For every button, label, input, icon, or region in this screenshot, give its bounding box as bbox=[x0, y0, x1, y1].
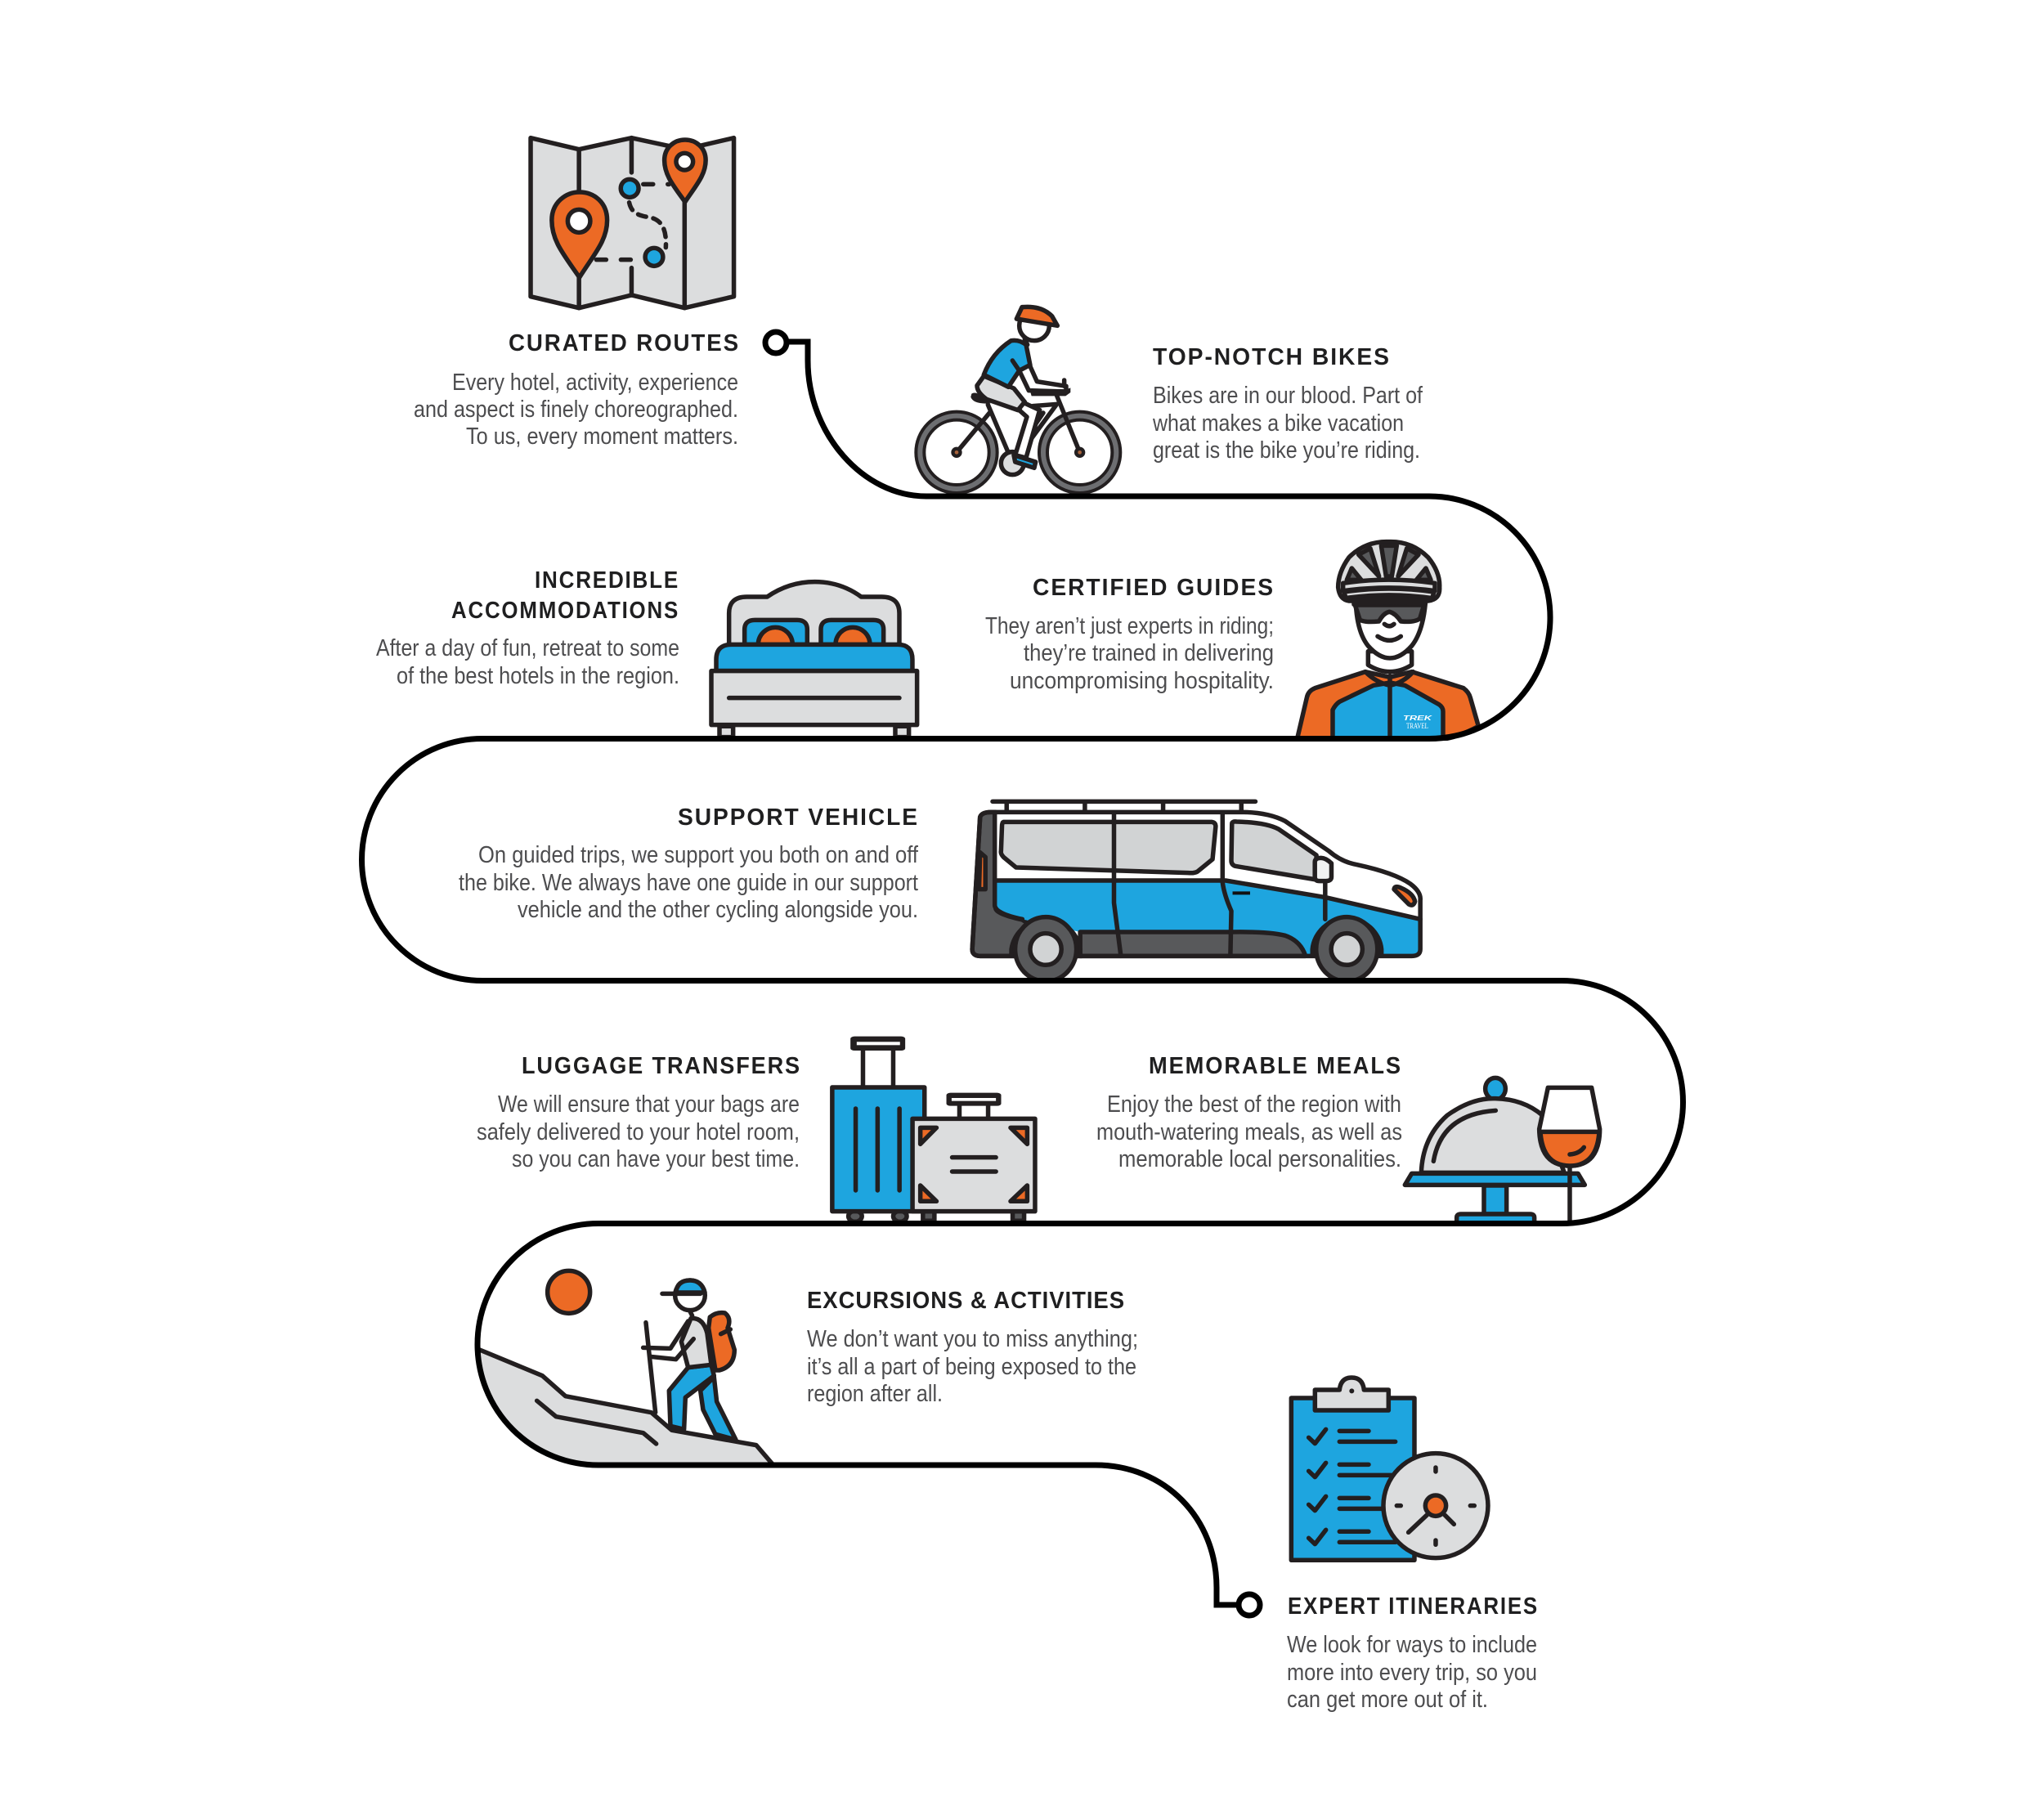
heading: incredible accommodations: ACCOMMODATIONS bbox=[451, 598, 679, 624]
text: memorable meals: mouth-watering meals, as well as bbox=[1096, 1119, 1402, 1145]
text: certified guides: uncompromising hospitality. bbox=[1010, 668, 1274, 694]
heading: excursions and activities: EXCURSIONS & ACTIVITIES bbox=[807, 1288, 1125, 1314]
text: memorable meals: Enjoy the best of the region with bbox=[1107, 1091, 1401, 1118]
text: support vehicle: vehicle and the other cycling alongside you. bbox=[518, 897, 918, 923]
heading: incredible accommodations: INCREDIBLE bbox=[535, 567, 679, 594]
heading: curated routes: CURATED ROUTES bbox=[509, 330, 740, 356]
heading: incredible accommodations bbox=[451, 567, 679, 624]
icon: luggage bbox=[832, 1037, 1035, 1221]
heading: expert itineraries: EXPERT ITINERARIES bbox=[1288, 1593, 1539, 1620]
heading: certified guides: CERTIFIED GUIDES bbox=[1033, 575, 1275, 601]
text: curated routes: Every hotel, activity, experience bbox=[452, 370, 738, 396]
text: incredible accommodations bbox=[376, 567, 679, 689]
text: incredible accommodations: After a day of fun, retreat to some bbox=[376, 635, 679, 661]
text: luggage transfers bbox=[477, 1053, 801, 1172]
icon: guide with helmet and jersey bbox=[1298, 542, 1478, 738]
text: luggage transfers: We will ensure that your bags are bbox=[498, 1091, 800, 1118]
heading: luggage transfers: LUGGAGE TRANSFERS bbox=[522, 1053, 801, 1079]
heading: top-notch bikes: TOP-NOTCH BIKES bbox=[1153, 344, 1391, 370]
route end marker bbox=[1239, 1594, 1260, 1616]
text: support vehicle: On guided trips, we support you both on and off bbox=[478, 842, 919, 868]
text: expert itineraries: more into every trip, so you bbox=[1287, 1660, 1537, 1686]
text: excursions and activities bbox=[807, 1288, 1138, 1407]
text: top-notch bikes: great is the bike you’re riding. bbox=[1153, 437, 1420, 464]
jersey wordmark: TREK bbox=[1403, 715, 1433, 722]
text: excursions and activities: it’s all a part of being exposed to the bbox=[807, 1354, 1136, 1380]
text: curated routes: To us, every moment matters. bbox=[466, 423, 738, 450]
icon: folded map with pins bbox=[531, 138, 734, 308]
icon: cyclist on bike bbox=[920, 307, 1116, 489]
icon: bed bbox=[711, 582, 917, 737]
text: certified guides: They aren’t just experts in riding; bbox=[985, 613, 1274, 639]
text: top-notch bikes bbox=[1152, 344, 1423, 464]
text: expert itineraries: can get more out of it. bbox=[1287, 1687, 1488, 1713]
text: curated routes: and aspect is finely choreographed. bbox=[414, 397, 738, 423]
text: incredible accommodations: of the best hotels in the region. bbox=[397, 663, 679, 689]
jersey wordmark: TRAVEL bbox=[1406, 722, 1428, 730]
text: top-notch bikes: what makes a bike vacation bbox=[1152, 410, 1404, 437]
route start marker bbox=[765, 332, 787, 353]
text: excursions and activities: region after all. bbox=[807, 1381, 943, 1407]
text: expert itineraries bbox=[1287, 1593, 1539, 1713]
icon: clipboard checklist with clock bbox=[1291, 1378, 1488, 1560]
icon: cloche, table and wine glass bbox=[1405, 1078, 1600, 1223]
text: certified guides bbox=[985, 575, 1275, 694]
icon: support van bbox=[972, 801, 1420, 981]
text: memorable meals: memorable local personalities. bbox=[1118, 1146, 1401, 1172]
text: support vehicle bbox=[459, 804, 919, 923]
heading: support vehicle: SUPPORT VEHICLE bbox=[678, 804, 919, 831]
icon: sun bbox=[548, 1270, 590, 1313]
text: memorable meals bbox=[1096, 1053, 1402, 1172]
heading: memorable meals: MEMORABLE MEALS bbox=[1149, 1053, 1402, 1079]
text: luggage transfers: safely delivered to your hotel room, bbox=[477, 1119, 800, 1145]
text: curated routes bbox=[414, 330, 740, 450]
text: top-notch bikes: Bikes are in our blood. Part of bbox=[1153, 383, 1423, 409]
jersey wordmark bbox=[1403, 715, 1433, 730]
icon: clock bbox=[1383, 1454, 1488, 1558]
text: excursions and activities: We don’t want you to miss anything; bbox=[807, 1326, 1138, 1352]
icon: hiker on a hillside with sun bbox=[477, 1270, 773, 1464]
text: expert itineraries: We look for ways to include bbox=[1287, 1632, 1537, 1658]
text: support vehicle: the bike. We always have one guide in our support bbox=[459, 870, 918, 896]
route line bbox=[361, 332, 1683, 1616]
text: certified guides: they’re trained in delivering bbox=[1024, 640, 1274, 666]
text: luggage transfers: so you can have your best time. bbox=[512, 1146, 800, 1172]
